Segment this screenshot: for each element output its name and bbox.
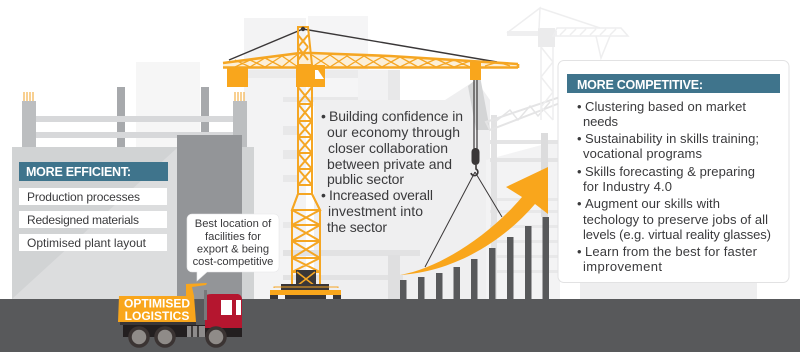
list: competitive items: for Industry 4.0 bbox=[583, 179, 672, 194]
hook and slings bbox=[425, 80, 502, 267]
list: competitive items: Augment our skills with bbox=[585, 196, 720, 211]
list: competitive items: Sustainability in skills training; bbox=[585, 131, 759, 146]
heading: more competitive: MORE COMPETITIVE: bbox=[577, 78, 703, 92]
bar chart bbox=[400, 217, 549, 299]
heading: more competitive bbox=[567, 74, 780, 93]
heading: more efficient bbox=[19, 162, 168, 181]
truck tipper box bbox=[118, 283, 207, 325]
item: redesigned materials: Redesigned materials bbox=[27, 213, 139, 227]
crane base bbox=[270, 270, 341, 299]
crane bbox=[223, 27, 518, 299]
panel: more competitive bbox=[558, 60, 789, 282]
text: centre bullets: Building confidence in bbox=[329, 108, 463, 124]
callout: best location: Best location of bbox=[195, 218, 272, 230]
background scaffolding and distant crane bbox=[486, 8, 757, 299]
left building frame bbox=[12, 87, 254, 299]
list: competitive items: • bbox=[577, 131, 582, 146]
text: centre bullets: our economy through bbox=[327, 124, 460, 140]
truck details bbox=[187, 326, 205, 337]
crane trolley bbox=[470, 62, 481, 80]
background skyline bbox=[136, 16, 490, 299]
callout: best location: cost-competitive bbox=[193, 256, 273, 268]
text: centre bullets: • bbox=[321, 187, 326, 203]
truck: optimised logistics bbox=[118, 283, 242, 346]
truck tipper box: OPTIMISED bbox=[124, 296, 190, 310]
heading: more efficient: MORE EFFICIENT: bbox=[26, 165, 131, 179]
list: competitive items: vocational programs bbox=[583, 146, 702, 161]
item: optimised plant layout bbox=[19, 234, 167, 251]
list: competitive items: improvement bbox=[583, 259, 662, 274]
text: centre bullets: Increased overall bbox=[329, 187, 433, 203]
list: competitive items: needs bbox=[583, 114, 618, 129]
item: production processes: Production processes bbox=[27, 190, 140, 204]
list: competitive items: • bbox=[577, 244, 582, 259]
list: competitive items: Learn from the best for faster bbox=[585, 244, 758, 259]
arrow: growth bbox=[400, 167, 548, 275]
callout: best location bbox=[187, 214, 279, 281]
item: redesigned materials bbox=[19, 211, 167, 228]
text: centre bullets: between private and bbox=[327, 156, 452, 172]
list: competitive items: Clustering based on market bbox=[585, 99, 746, 114]
truck chassis bbox=[123, 325, 242, 337]
item: production processes bbox=[19, 188, 167, 205]
list: competitive items: techology to preserve jobs of all bbox=[583, 212, 768, 227]
text: centre bullets: the sector bbox=[327, 219, 387, 235]
item: optimised plant layout: Optimised plant layout bbox=[27, 236, 147, 250]
truck cab bbox=[204, 290, 242, 328]
crane cables bbox=[229, 29, 497, 62]
list: competitive items: • bbox=[577, 164, 582, 179]
list: competitive items bbox=[577, 99, 771, 274]
text: centre bullets: investment into bbox=[328, 203, 423, 219]
list: competitive items: • bbox=[577, 196, 582, 211]
crane jib bbox=[223, 53, 518, 68]
crane cab bbox=[296, 65, 325, 87]
truck wheels bbox=[130, 328, 225, 346]
text: centre bullets: closer collaboration bbox=[328, 140, 448, 156]
list: competitive items: Skills forecasting & preparing bbox=[585, 164, 755, 179]
text: centre bullets: public sector bbox=[327, 171, 404, 187]
callout: best location: facilities for bbox=[205, 231, 261, 243]
crane mast bbox=[292, 27, 320, 287]
panel: more efficient bbox=[19, 162, 168, 251]
text: centre bullets bbox=[321, 108, 463, 235]
text: centre bullets: • bbox=[321, 108, 326, 124]
truck tipper box: LOGISTICS bbox=[125, 309, 189, 323]
ground bbox=[0, 299, 800, 352]
list: competitive items: • bbox=[577, 99, 582, 114]
crane counterweight bbox=[227, 68, 248, 87]
callout: best location: export & being bbox=[197, 244, 269, 256]
list: competitive items: levels (e.g. virtual reality glasses) bbox=[583, 227, 771, 242]
